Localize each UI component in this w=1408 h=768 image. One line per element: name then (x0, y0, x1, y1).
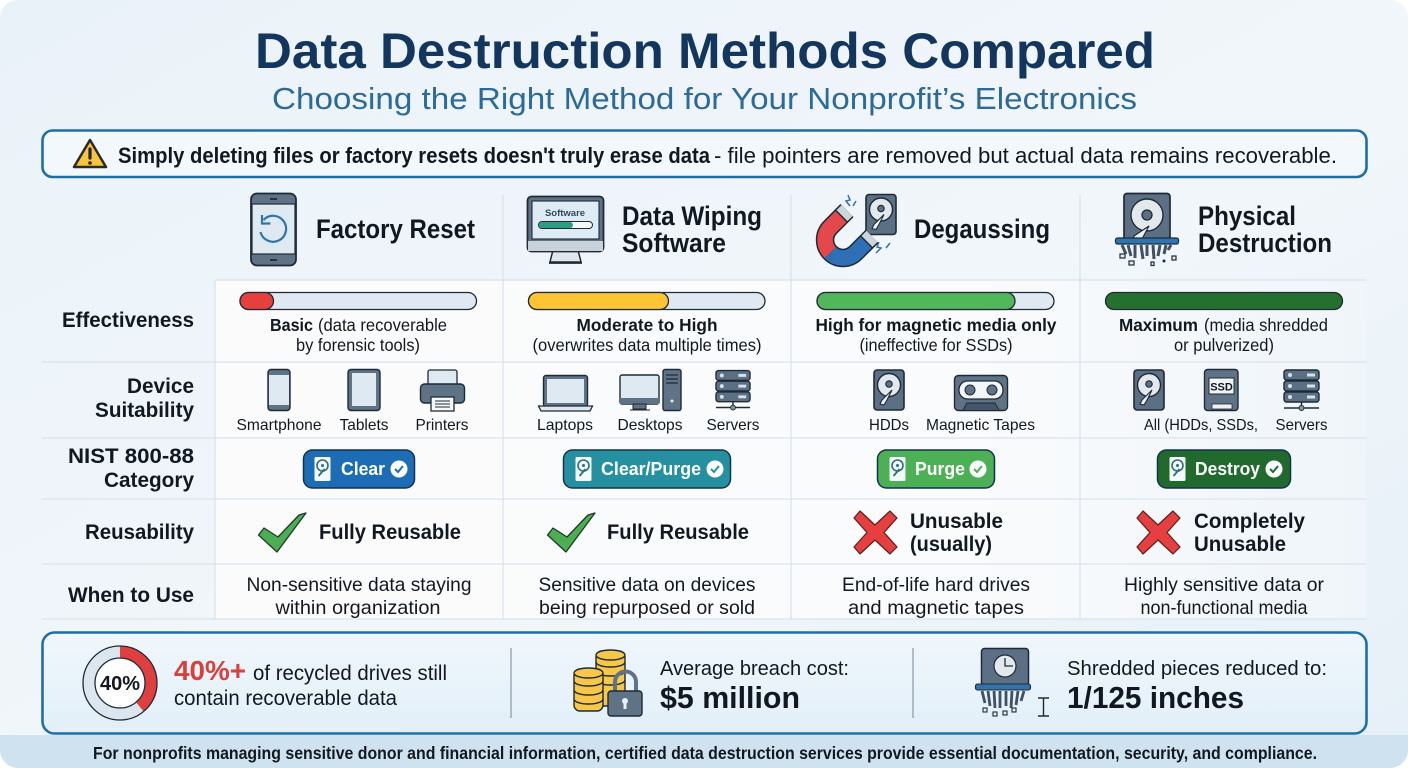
icon: laptop (538, 376, 592, 411)
icon: SSD: SSD (1210, 382, 1233, 394)
footer text: For nonprofits managing sensitive donor and financial information, certified data destruction services provide essential documentation, security, and compliance. (93, 743, 1317, 763)
column header: physical destruction (1116, 194, 1332, 266)
icon: SSD (1204, 370, 1238, 410)
heading (1198, 201, 1332, 258)
heading: Destruction (1198, 228, 1332, 258)
heading: Software (622, 228, 726, 258)
devices: physical destruction (1134, 370, 1328, 434)
device labels (537, 417, 760, 434)
stat: breach cost (660, 657, 849, 715)
row labels (62, 309, 194, 607)
rating text: or pulverized) (1174, 335, 1274, 355)
icon: smartphone (268, 370, 290, 410)
warning text: Simply deleting files or factory resets doesn't truly erase data (118, 143, 711, 168)
meter: maximum (1106, 292, 1342, 310)
stat: recycled drives: of recycled drives still (253, 662, 447, 685)
device labels: Tablets (340, 417, 388, 434)
reusability: physical destruction (1137, 510, 1305, 556)
stat: breach cost: Average breach cost: (660, 657, 849, 680)
icon: hard drive (1134, 370, 1164, 410)
device labels: Smartphone (236, 417, 322, 434)
devices: data wiping (537, 370, 760, 434)
footer band (0, 735, 1408, 768)
icon: magnetic tape (954, 376, 1008, 410)
status text: Fully Reusable (607, 521, 749, 544)
heading: Physical (1198, 201, 1296, 231)
row labels: NIST 800-88 (68, 445, 194, 468)
rating text (532, 315, 762, 355)
status text: Unusable (1194, 533, 1286, 556)
when to use: degaussing: and magnetic tapes (848, 597, 1024, 619)
heading: Degaussing (914, 214, 1050, 244)
icon: hard drive (874, 370, 904, 410)
status text: Completely (1194, 510, 1305, 533)
when to use: degaussing (842, 574, 1030, 619)
status text (1194, 510, 1305, 556)
rating text: (ineffective for SSDs) (860, 335, 1012, 355)
row labels: Device (127, 375, 194, 398)
effectiveness: data wiping (528, 292, 765, 355)
heading (622, 201, 762, 258)
stat: recycled drives: 40%+ (174, 655, 246, 686)
when to use: physical destruction: non-functional media (1140, 597, 1308, 619)
rating text: Basic (270, 315, 313, 335)
rating text: High for magnetic media only (816, 315, 1057, 335)
device labels (869, 417, 1035, 434)
icon: server (1284, 370, 1319, 410)
column header: factory reset (251, 194, 475, 266)
icon: monitor with progress bar: Software (545, 208, 585, 219)
icon: coins and padlock (574, 650, 642, 716)
effectiveness: physical destruction (1106, 292, 1342, 355)
badge: Destroy (1158, 450, 1290, 488)
row labels: Suitability (95, 399, 194, 422)
device labels: Laptops (537, 417, 593, 434)
row labels: Reusability (85, 521, 194, 544)
effectiveness: degaussing (816, 292, 1057, 355)
chart: 40 percent donut (83, 646, 157, 720)
icon: phone with reset arrow (251, 194, 296, 266)
device labels: Magnetic Tapes (926, 417, 1035, 434)
icon: drive in shredder (1116, 194, 1178, 266)
when to use: factory reset (246, 574, 472, 619)
badge: Clear/Purge: Clear/Purge (601, 458, 701, 479)
row labels: Effectiveness (62, 309, 194, 332)
when to use: data wiping: being repurposed or sold (539, 597, 755, 619)
when to use: physical destruction: Highly sensitive data or (1124, 574, 1324, 596)
warning text (118, 143, 1337, 168)
warning text: - file pointers are removed but actual data remains recoverable. (714, 143, 1337, 168)
icon: tablet (348, 370, 380, 410)
stat: recycled drives: contain recoverable data (174, 687, 397, 710)
when to use: degaussing: End-of-life hard drives (842, 574, 1030, 596)
device labels: Printers (416, 417, 468, 434)
stat: shred size (1067, 657, 1327, 715)
meter: high for magnetic (817, 292, 1054, 310)
panel: key statistics (42, 632, 1366, 734)
status text: Fully Reusable (319, 521, 461, 544)
title: Data Destruction Methods Compared (255, 23, 1155, 79)
column header: data wiping software (528, 196, 762, 263)
when to use: data wiping: Sensitive data on devices (538, 574, 756, 596)
icon: magnet and hard drive (825, 194, 896, 258)
meter: basic (240, 292, 476, 310)
when to use: data wiping (538, 574, 756, 619)
callout: deletion warning (42, 130, 1366, 177)
row labels: Category (104, 469, 194, 492)
devices: degaussing (869, 370, 1035, 434)
rating text: Moderate to High (576, 315, 718, 335)
device labels (236, 417, 468, 434)
badge: Clear/Purge (564, 450, 730, 488)
reusability: data wiping (548, 513, 749, 552)
badge: Purge (878, 450, 994, 488)
icon: printer (420, 370, 464, 411)
device labels: All (HDDs, SSDs, (1144, 417, 1258, 434)
subtitle: Choosing the Right Method for Your Nonprofit’s Electronics (272, 81, 1137, 116)
status text (910, 510, 1003, 556)
rating text: (data recoverable (318, 315, 447, 335)
icon: monitor with progress bar (528, 196, 604, 263)
icon: warning triangle (74, 140, 106, 167)
badge: Destroy: Destroy (1195, 458, 1261, 479)
badge: Purge: Purge (915, 458, 965, 479)
devices: factory reset (236, 370, 468, 434)
device labels: HDDs (869, 417, 909, 434)
rating text: (overwrites data multiple times) (532, 335, 762, 355)
icon: red cross (1137, 511, 1180, 554)
meter: moderate to high (528, 292, 765, 310)
icon: check mark (548, 513, 595, 552)
rating text: by forensic tools) (296, 335, 420, 355)
when to use: physical destruction (1124, 574, 1324, 619)
device labels: Servers (1276, 417, 1328, 434)
stat: recycled drives (174, 655, 447, 710)
stat: shred size: Shredded pieces reduced to: (1067, 657, 1327, 680)
badge: Clear: Clear (341, 458, 385, 479)
icon: desktop and tower (620, 370, 681, 410)
reusability: degaussing (854, 510, 1003, 556)
rating text: Maximum (1119, 315, 1198, 335)
status text: (usually) (910, 533, 992, 556)
chart: 40 percent donut: 40% (100, 673, 140, 695)
device labels (1144, 417, 1328, 434)
column header: degaussing (825, 194, 1050, 258)
when to use: factory reset: within organization (274, 597, 440, 619)
comparison table grid (42, 195, 1366, 619)
heading: Data Wiping (622, 201, 762, 231)
icon: server (716, 371, 750, 410)
effectiveness: factory reset (240, 292, 476, 355)
stat: breach cost: $5 million (660, 680, 800, 715)
when to use: factory reset: Non-sensitive data staying (246, 574, 472, 596)
device labels: Desktops (618, 417, 682, 434)
icon: red cross (854, 511, 897, 554)
badge: Clear (304, 450, 414, 488)
rating text (270, 315, 447, 355)
row labels: When to Use (68, 584, 194, 607)
rating text (1119, 315, 1328, 355)
icon: shredder with size marker (976, 648, 1049, 716)
rating text (816, 315, 1057, 355)
status text: Unusable (910, 510, 1003, 533)
reusability: factory reset (258, 513, 461, 552)
icon: check mark (258, 513, 306, 552)
device labels: Servers (706, 417, 760, 434)
stat: shred size: 1/125 inches (1067, 680, 1244, 715)
heading: Factory Reset (316, 214, 475, 244)
rating text: (media shredded (1204, 315, 1328, 335)
